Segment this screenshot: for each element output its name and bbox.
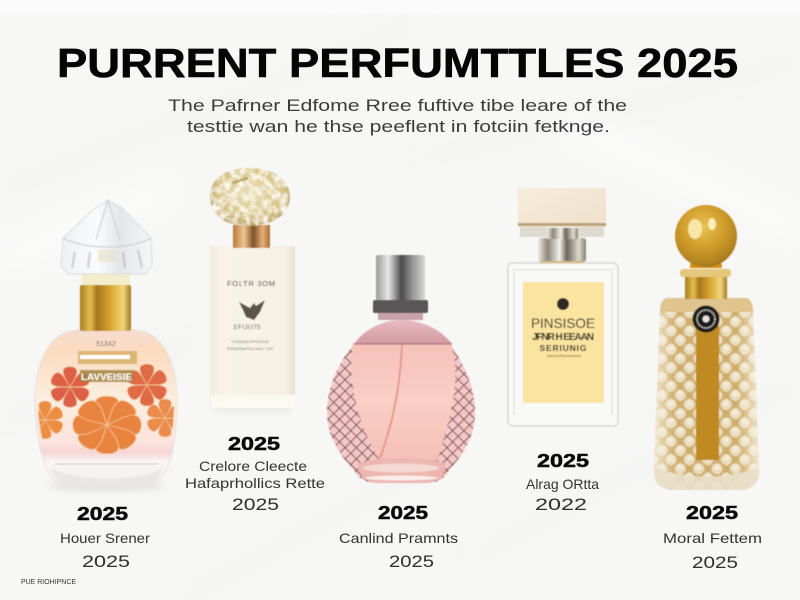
bottle 2: cream bottle with gold stone cap xyxy=(210,168,295,410)
column 5 text: Moral Fettem xyxy=(663,530,762,546)
bottle 3: pink netted round bottle xyxy=(327,255,475,483)
gold collar xyxy=(685,277,727,299)
yellow label: SERIUNIG xyxy=(540,343,587,353)
column 2 text: Hafaprhollics Rette xyxy=(185,475,325,491)
neck xyxy=(82,262,130,286)
amber column xyxy=(696,325,719,460)
column 3 text: 2025 xyxy=(378,503,428,523)
label text: TVASBIGLIPPERUVE xyxy=(231,340,270,344)
silver collar xyxy=(373,300,428,313)
yellow label: JFNR H EEAAN xyxy=(532,332,594,343)
column 5 text: 2025 xyxy=(686,503,738,523)
silver neck xyxy=(538,238,586,262)
footer note: PUE RIOHIPNCE xyxy=(21,579,76,586)
label text: PRINERBATEA VAAL TOR xyxy=(227,347,274,351)
column 5 text xyxy=(663,503,762,572)
column 1 text: Houer Srener xyxy=(60,530,150,546)
column 2 text: 2025 xyxy=(232,495,279,514)
label: LAVVEISIE xyxy=(81,372,132,383)
label: 51342 xyxy=(96,341,116,348)
yellow label: PINSISOE xyxy=(531,315,595,331)
badge xyxy=(692,306,720,332)
column 4 text: 2025 xyxy=(537,451,589,471)
label text: FOLTR 3OM xyxy=(227,279,275,288)
bottle 5: gold ball woven glass bottle xyxy=(654,205,759,490)
column 2 text xyxy=(185,434,325,514)
column 3 text: 2025 xyxy=(389,552,434,571)
label text xyxy=(227,279,275,351)
yellow label xyxy=(523,282,604,403)
beige cap xyxy=(518,188,606,237)
column 4 text: 2022 xyxy=(535,495,587,514)
crystal cap xyxy=(61,200,152,274)
subtitle: The Pafrner Edfome Rree fuftive tibe leare of the xyxy=(168,96,627,115)
column 2 text: Crelore Cleecte xyxy=(199,458,307,474)
silver cap xyxy=(376,255,425,300)
column 1 text: 2025 xyxy=(77,504,128,524)
gold stone cap xyxy=(210,168,290,226)
gold collar xyxy=(80,285,131,331)
yellow label: aaon5souwrs xyxy=(547,353,581,358)
title: PURRENT PERFUMTTLES 2025 xyxy=(57,40,738,86)
label text: EFIJU75 xyxy=(234,324,261,331)
label xyxy=(78,341,137,383)
column 4 text xyxy=(526,451,599,514)
bottle 1: orange flower glass bottle xyxy=(25,200,185,490)
gold ball stopper xyxy=(675,205,737,267)
column 5 text: 2025 xyxy=(692,553,738,572)
column 3 text xyxy=(339,503,458,571)
column 4 text: Alrag ORtta xyxy=(526,476,599,492)
column 3 text: Canlind Pramnts xyxy=(339,530,458,546)
subtitle: testtie wan he thse peeflent in fotciin fetknge. xyxy=(187,117,610,136)
column 2 text: 2025 xyxy=(228,434,280,454)
column 1 text: 2025 xyxy=(82,552,130,571)
flower motifs xyxy=(38,363,174,455)
copper collar xyxy=(233,225,270,248)
subtitle xyxy=(168,96,627,136)
column 1 text xyxy=(60,504,150,571)
bottle 4: square glass bottle with yellow label xyxy=(508,188,618,426)
